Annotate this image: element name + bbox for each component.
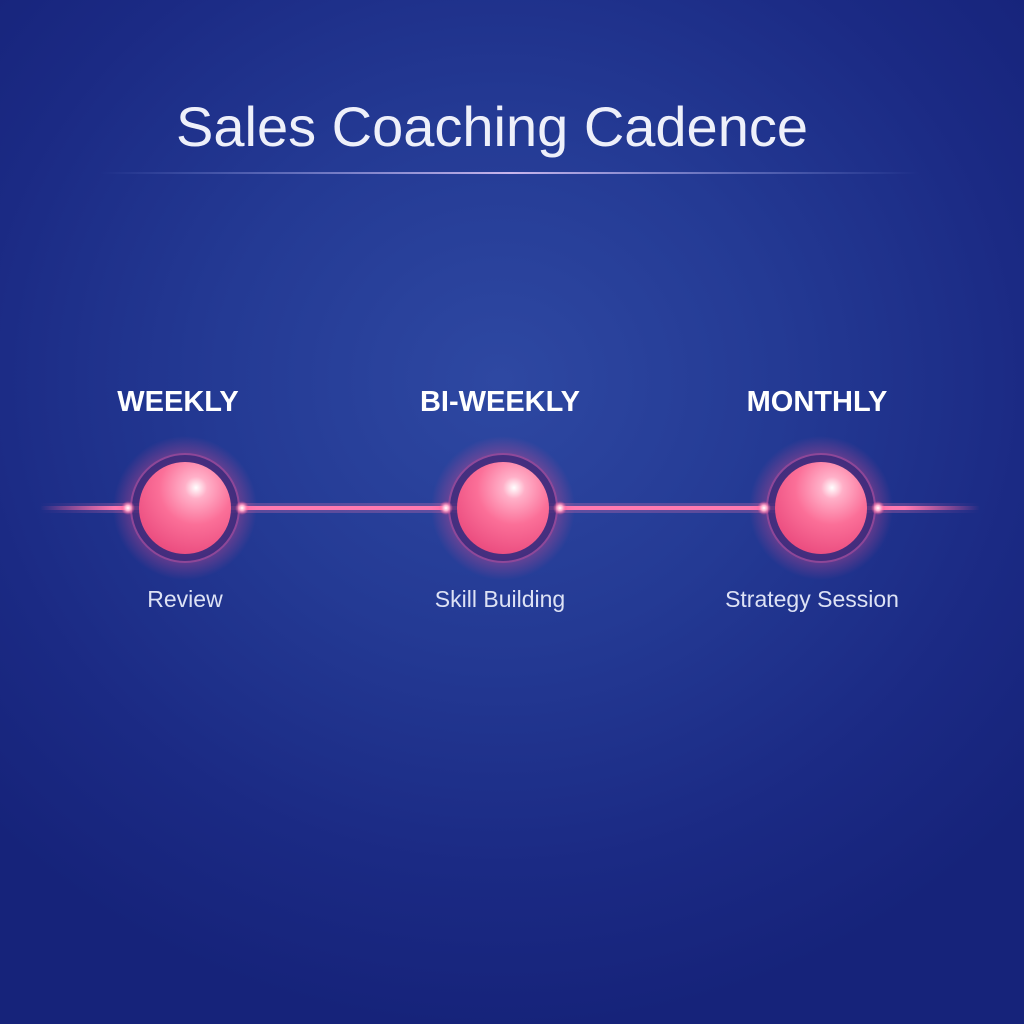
label: monthly: MONTHLY [747, 386, 887, 418]
label: bi-weekly: BI-WEEKLY [420, 386, 580, 418]
label: weekly: WEEKLY [117, 386, 239, 418]
sublabel: strategy session: Strategy Session [725, 586, 899, 612]
title: Sales Coaching Cadence [176, 95, 808, 158]
sublabel: skill building: Skill Building [435, 586, 565, 612]
node: weekly [113, 436, 257, 580]
timeline line [40, 503, 980, 513]
node: bi-weekly [431, 436, 575, 580]
node: monthly [749, 436, 893, 580]
sublabel: review: Review [147, 586, 223, 612]
